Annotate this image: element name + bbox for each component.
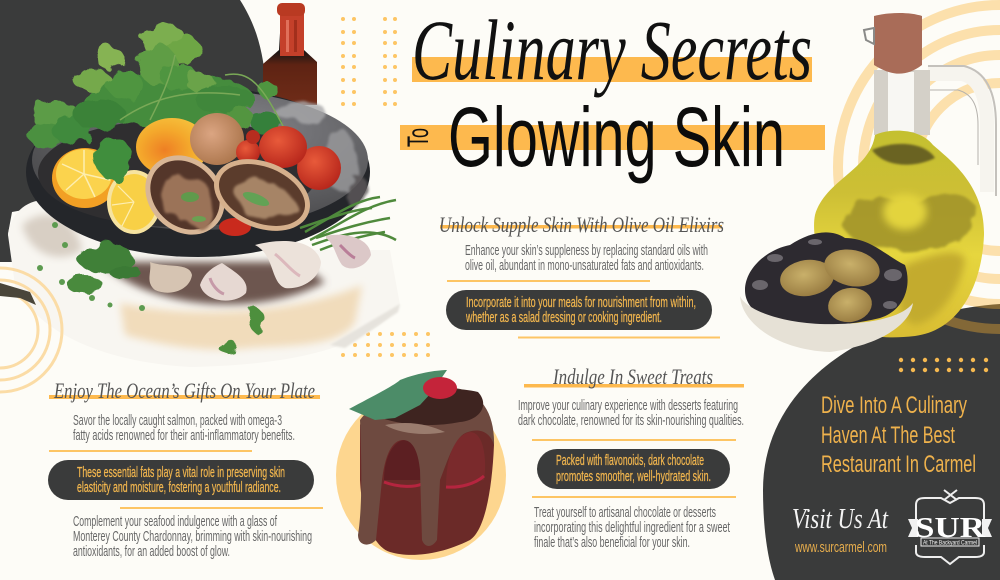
fruit potato — [190, 113, 244, 165]
holly leaf — [349, 370, 447, 420]
callout pill — [48, 460, 314, 500]
tomatoes — [236, 126, 341, 190]
bowl — [740, 296, 913, 352]
callout pill: Incorporate it into your meals for nourishment from within, — [466, 294, 696, 311]
olives — [745, 232, 908, 326]
herb sprig over lemon — [95, 136, 131, 180]
logo tagline: At The Backyard Carmel — [923, 540, 977, 546]
callout pill: promotes smoother, well-hydrated skin. — [556, 468, 711, 485]
body text: Savor the locally caught salmon, packed with omega-3 — [73, 412, 282, 429]
cork — [874, 13, 922, 74]
title bars — [400, 57, 825, 150]
dot pattern top — [341, 17, 397, 106]
body text: Enhance your skin’s suppleness by replacing standard oils with — [465, 242, 708, 259]
body text: Improve your culinary experience with desserts featuring — [518, 397, 738, 414]
plate body — [26, 87, 370, 257]
green flecks — [37, 222, 145, 311]
body text — [465, 242, 708, 274]
plate wash — [8, 200, 400, 367]
chocolate glaze — [358, 388, 494, 546]
decorative rings right — [838, 5, 1000, 329]
body text: finale that’s also beneficial for your skin. — [534, 534, 690, 551]
shells — [129, 139, 321, 251]
jug body — [814, 131, 984, 337]
divider — [120, 507, 323, 509]
body text: olive oil, abundant in mono-unsaturated fats and antioxidants. — [465, 257, 704, 274]
section: sweet treats — [518, 364, 744, 551]
logo frame — [916, 498, 984, 564]
callout pill: elasticity and moisture, fostering a youthful radiance. — [77, 479, 281, 496]
herb lower left — [67, 243, 141, 294]
section: ocean's gifts — [48, 378, 323, 560]
herbs top — [29, 24, 279, 149]
callout pill: Packed with flavonoids, dark chocolate — [556, 452, 704, 469]
heading bar — [524, 384, 744, 388]
neck — [874, 70, 930, 135]
lemon wedge — [107, 170, 161, 234]
filling line — [384, 476, 484, 487]
callout pill — [537, 449, 730, 489]
garlic — [149, 235, 371, 301]
cake body — [360, 388, 494, 555]
herb stems — [120, 55, 285, 130]
website: www.surcarmel.com — [794, 539, 887, 556]
body text — [534, 504, 730, 551]
body text — [73, 513, 312, 560]
illustration: plate of food — [8, 24, 400, 367]
dot pattern middle — [341, 332, 430, 357]
heading: Unlock Supple Skin With Olive Oil Elixirs — [439, 212, 724, 237]
body text: dark chocolate, renowned for its skin-nourishing qualities. — [518, 412, 744, 429]
cherry — [423, 377, 457, 399]
glaze top — [375, 389, 483, 425]
illustration: olive oil jug — [814, 13, 996, 337]
fruit orange — [136, 118, 208, 176]
yellow circle — [336, 390, 506, 560]
plate mottling — [274, 102, 365, 208]
divider — [532, 439, 736, 441]
divider — [532, 496, 736, 498]
decorative rings left — [0, 268, 62, 392]
illustration: sauce bottle — [263, 3, 317, 105]
callout pill: These essential fats play a vital role in preserving skin — [77, 464, 285, 481]
arch sponge — [384, 440, 422, 480]
fork and knife icon — [944, 490, 957, 500]
illustration: bowl of olives — [740, 232, 913, 352]
logo: SUR restaurant — [908, 490, 992, 564]
herb sprig bottom — [218, 308, 263, 353]
call to action text — [821, 392, 976, 478]
brush streaks left — [0, 283, 36, 305]
panel: dark call to action background — [763, 304, 1000, 580]
body text — [518, 397, 744, 429]
lemon half — [52, 148, 118, 208]
heading bar — [440, 225, 722, 228]
chives — [300, 197, 396, 250]
body text: fatty acids renowned for their anti-inflammatory benefits. — [73, 427, 295, 444]
title script line: Culinary Secrets — [412, 2, 812, 98]
title word: To: To — [402, 128, 435, 147]
logo wordmark: SUR — [915, 513, 986, 544]
body text: incorporating this delightful ingredient for a sweet — [534, 519, 730, 536]
divider — [447, 280, 650, 282]
heading bar — [49, 395, 320, 399]
divider — [518, 336, 720, 338]
handle — [928, 74, 987, 192]
visit us script: Visit Us At — [792, 504, 889, 535]
heading: Indulge In Sweet Treats — [552, 364, 713, 389]
body text: Complement your seafood indulgence with a glass of — [73, 513, 277, 530]
body text: Treat yourself to artisanal chocolate or desserts — [534, 504, 716, 521]
dark corner shape top left — [0, 0, 266, 262]
section: olive oil — [439, 212, 724, 338]
divider — [49, 450, 252, 452]
heading: Enjoy The Ocean’s Gifts On Your Plate — [53, 378, 315, 403]
illustration: chocolate cake — [336, 370, 506, 560]
callout pill: whether as a salad dressing or cooking ingredient. — [465, 309, 662, 326]
banner ends — [908, 519, 992, 537]
body text: antioxidants, for an added boost of glow. — [73, 543, 230, 560]
callout pill — [446, 290, 712, 330]
dot pattern call to action — [899, 358, 988, 372]
pale glaze band — [385, 423, 445, 434]
body text: Monterey County Chardonnay, brimming with skin-nourishing — [73, 528, 312, 545]
title main line: Glowing Skin — [448, 90, 785, 184]
body text — [73, 412, 295, 444]
